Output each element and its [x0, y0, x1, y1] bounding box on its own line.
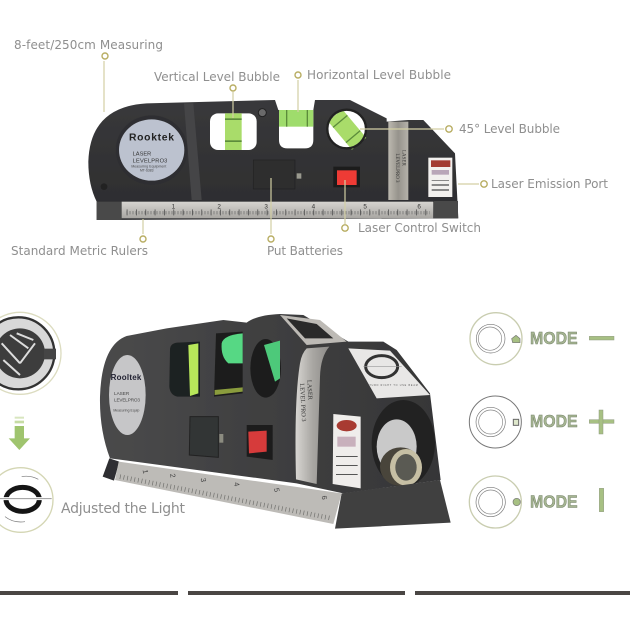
- label: Rooktek sticker: LASER: [114, 391, 130, 396]
- label: Rooktek sticker: [109, 355, 146, 435]
- callout: horizontal bubble: Horizontal Level Bubble: [307, 68, 451, 82]
- laser emission port: [372, 400, 435, 487]
- leader lines: [102, 53, 487, 242]
- metric ruler: 4: [312, 203, 316, 210]
- body highlight: [184, 103, 202, 200]
- mode minus: [470, 313, 614, 365]
- metric ruler: [122, 202, 433, 218]
- base foot right: [335, 480, 451, 529]
- horizontal bubble window: [279, 110, 313, 148]
- label: Rooktek sticker: Measuring Equip: [113, 409, 139, 413]
- callout: metric rulers: Standard Metric Rulers: [11, 244, 148, 258]
- metric ruler: 3: [264, 203, 268, 210]
- base foot left: [103, 458, 119, 481]
- battery cover: [253, 160, 301, 189]
- ruler: 4: [232, 481, 242, 487]
- callout: measuring: 8-feet/250cm Measuring: [14, 38, 163, 52]
- window: 45 degree bubble: [250, 339, 281, 398]
- ruler: 2: [168, 473, 178, 478]
- mode minus: MODE: [530, 328, 578, 348]
- corner screw: [101, 183, 107, 190]
- switch: [247, 425, 273, 460]
- mode vertical: [469, 476, 604, 528]
- metric ruler: 6: [417, 203, 421, 210]
- feet: [97, 202, 122, 220]
- label: Rooktek sticker: LEVELPRO3: [114, 398, 140, 403]
- window: horizontal bubble: [214, 332, 243, 397]
- label: Rooktek brand sticker: LEVELPRO3: [133, 158, 167, 164]
- ruler: [115, 462, 342, 524]
- vertical bubble window: [210, 113, 257, 150]
- top opening: [280, 315, 347, 345]
- label: Rooktek brand sticker: [116, 115, 188, 185]
- callout: 45 degree bubble: 45° Level Bubble: [459, 122, 560, 136]
- callout: batteries: Put Batteries: [267, 244, 343, 258]
- bottom strip segments: [0, 591, 630, 595]
- device: angled front view of laser level: [100, 314, 451, 529]
- silver band: [388, 122, 408, 200]
- silver band: LASER: [401, 150, 406, 166]
- label: Rooktek brand sticker: MT-S383: [140, 168, 154, 172]
- metric ruler: 1: [172, 203, 176, 210]
- laser switch: [333, 167, 360, 187]
- detail circle: knurled laser head: [0, 312, 61, 394]
- warning sticker: [428, 158, 452, 197]
- ruler: 6: [320, 495, 329, 500]
- text: adjusted the light: Adjusted the Light: [61, 501, 186, 517]
- top panel with dial: TURN RIGHT TO USE BEAM: [369, 384, 418, 387]
- screw: [258, 109, 266, 117]
- label: Rooktek sticker: Rooltek: [111, 373, 142, 382]
- ruler: 1: [141, 469, 150, 474]
- window: vertical bubble: [169, 342, 200, 397]
- silver band: [295, 347, 329, 484]
- mode plus: [469, 396, 614, 448]
- arrow: green down: [9, 417, 30, 450]
- silver band: LASER: [305, 380, 313, 401]
- callout: laser control switch: Laser Control Switch: [358, 221, 481, 235]
- top panel with dial: [348, 348, 430, 398]
- callout: vertical bubble: Vertical Level Bubble: [154, 70, 280, 84]
- device body: [100, 314, 441, 493]
- device body: [88, 100, 458, 220]
- callout: laser emission port: Laser Emission Port: [491, 177, 608, 191]
- detail circle: adjusting dial: [0, 468, 53, 532]
- silver band: LEVELPRO 3: [394, 153, 399, 183]
- label: Rooktek brand sticker: Measuring Equipment: [131, 165, 166, 169]
- ruler: 3: [199, 477, 208, 483]
- metric ruler: 2: [217, 203, 221, 210]
- label: Rooktek brand sticker: LASER: [133, 152, 151, 158]
- battery cover: [189, 417, 223, 457]
- warning sticker: [333, 414, 361, 488]
- label: Rooktek brand sticker: Rooktek: [129, 132, 174, 143]
- mode vertical: MODE: [530, 491, 578, 511]
- 45 degree bubble window: [327, 109, 366, 150]
- metric ruler: 5: [363, 203, 367, 210]
- silver band: LEVEL PRO 3: [298, 383, 307, 422]
- mode plus: MODE: [530, 411, 578, 431]
- device: top side view of laser level: [88, 100, 458, 220]
- ruler: 5: [272, 487, 282, 493]
